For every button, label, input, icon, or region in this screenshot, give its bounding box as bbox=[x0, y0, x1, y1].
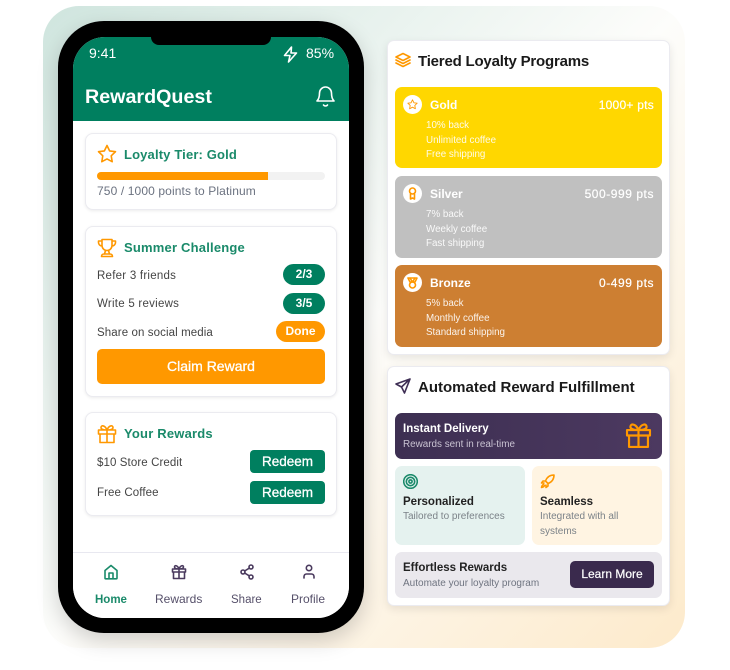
tile text: Integrated with all bbox=[540, 511, 618, 522]
notch bbox=[151, 37, 271, 45]
tile: seamless bbox=[532, 466, 662, 545]
tile title: Personalized bbox=[403, 496, 474, 508]
icon: rocket bbox=[540, 474, 555, 488]
tier benefits: 10% back bbox=[426, 120, 469, 131]
tier heading: Loyalty Tier: Gold bbox=[124, 147, 237, 162]
panel: automated reward fulfillment bbox=[387, 366, 670, 606]
icon: gift bbox=[626, 423, 652, 448]
status time: 9:41 bbox=[89, 45, 116, 61]
tier benefits: Fast shipping bbox=[426, 238, 484, 249]
phone mockup bbox=[58, 21, 364, 633]
tier name: Silver bbox=[430, 187, 463, 201]
tier benefits: Unlimited coffee bbox=[426, 134, 496, 146]
tile title: Seamless bbox=[540, 496, 593, 508]
icon: send bbox=[395, 378, 411, 394]
tier name: Gold bbox=[430, 98, 457, 112]
redeem button 1: Redeem bbox=[262, 454, 313, 469]
nav: home bbox=[104, 564, 118, 580]
tier benefits: Monthly coffee bbox=[426, 312, 490, 324]
icon: gift bbox=[98, 425, 116, 444]
tier icon bbox=[403, 184, 422, 203]
panel: tiered loyalty programs bbox=[387, 40, 670, 355]
tier: gold bbox=[395, 87, 662, 168]
bottom navigation bbox=[73, 552, 349, 618]
card: summer challenge bbox=[85, 226, 337, 397]
redeem button 2 bbox=[250, 481, 325, 504]
icon: layers bbox=[395, 52, 411, 68]
nav label: rewards: Rewards bbox=[155, 592, 202, 606]
nav label: home: Home bbox=[95, 594, 127, 606]
panel heading: Automated Reward Fulfillment bbox=[418, 379, 635, 396]
tier benefits bbox=[426, 209, 487, 249]
tier benefits: 7% back bbox=[426, 209, 464, 220]
tier benefits: Standard shipping bbox=[426, 327, 505, 338]
progress bar bbox=[97, 172, 325, 180]
redeem button 1 bbox=[250, 450, 325, 473]
learn more button bbox=[570, 561, 654, 588]
progress fill bbox=[97, 172, 268, 180]
banner title: Effortless Rewards bbox=[403, 562, 507, 574]
nav: share bbox=[240, 564, 254, 580]
tier points: 0-499 pts bbox=[599, 276, 654, 290]
panel heading: Tiered Loyalty Programs bbox=[418, 53, 589, 70]
nav: profile bbox=[303, 564, 315, 579]
tile text bbox=[540, 511, 618, 536]
badge 2/3 bbox=[283, 264, 325, 285]
tier benefits bbox=[426, 298, 505, 338]
nav: rewards bbox=[172, 564, 186, 580]
icon: trophy bbox=[98, 238, 116, 258]
learn more button: Learn More bbox=[581, 567, 643, 581]
tier: bronze bbox=[395, 265, 662, 347]
task 2: Write 5 reviews bbox=[97, 298, 179, 310]
tile text: Tailored to preferences bbox=[403, 511, 505, 522]
card: your rewards bbox=[85, 412, 337, 516]
badge done: Done bbox=[286, 324, 316, 338]
claim reward button bbox=[97, 349, 325, 384]
tile text: systems bbox=[540, 526, 577, 536]
tier benefits: Free shipping bbox=[426, 149, 485, 160]
tier icon bbox=[403, 95, 422, 114]
tier name: Bronze bbox=[430, 276, 471, 290]
nav label: share: Share bbox=[231, 594, 262, 606]
tier benefits bbox=[426, 120, 496, 160]
tier points: 500-999 pts bbox=[585, 187, 654, 201]
tier icon bbox=[403, 273, 422, 292]
task 1: Refer 3 friends bbox=[97, 270, 176, 282]
tier: silver bbox=[395, 176, 662, 258]
app name: RewardQuest bbox=[85, 86, 212, 108]
battery percent: 85% bbox=[306, 45, 334, 61]
tier points: 1000+ pts bbox=[599, 98, 654, 112]
banner: effortless rewards bbox=[395, 552, 662, 598]
banner subtitle: Automate your loyalty program bbox=[403, 578, 539, 589]
icon: bell bbox=[316, 86, 335, 107]
reward 1: $10 Store Credit bbox=[97, 457, 182, 469]
banner subtitle: Rewards sent in real-time bbox=[403, 439, 515, 450]
badge done bbox=[276, 321, 325, 342]
nav label: profile: Profile bbox=[291, 592, 325, 606]
reward 2: Free Coffee bbox=[97, 487, 159, 499]
badge 3/5: 3/5 bbox=[296, 296, 312, 310]
tier benefits: 5% back bbox=[426, 298, 464, 309]
icon: charge bolt bbox=[284, 46, 298, 63]
icon: target bbox=[403, 474, 418, 489]
icon: star bbox=[98, 144, 116, 162]
task 3: Share on social media bbox=[97, 327, 213, 339]
tier benefits: Weekly coffee bbox=[426, 224, 487, 234]
claim reward button: Claim Reward bbox=[167, 358, 255, 374]
badge 3/5 bbox=[283, 293, 325, 314]
phone screen bbox=[73, 37, 349, 618]
badge 2/3: 2/3 bbox=[296, 267, 312, 281]
card: loyalty tier bbox=[85, 133, 337, 210]
challenge heading: Summer Challenge bbox=[124, 240, 245, 255]
banner: instant delivery bbox=[395, 413, 662, 459]
rewards heading: Your Rewards bbox=[124, 426, 213, 441]
app header bbox=[73, 37, 349, 121]
banner title: Instant Delivery bbox=[403, 423, 489, 435]
points text: 750 / 1000 points to Platinum bbox=[97, 184, 256, 198]
redeem button 2: Redeem bbox=[262, 485, 313, 500]
tile: personalized bbox=[395, 466, 525, 545]
